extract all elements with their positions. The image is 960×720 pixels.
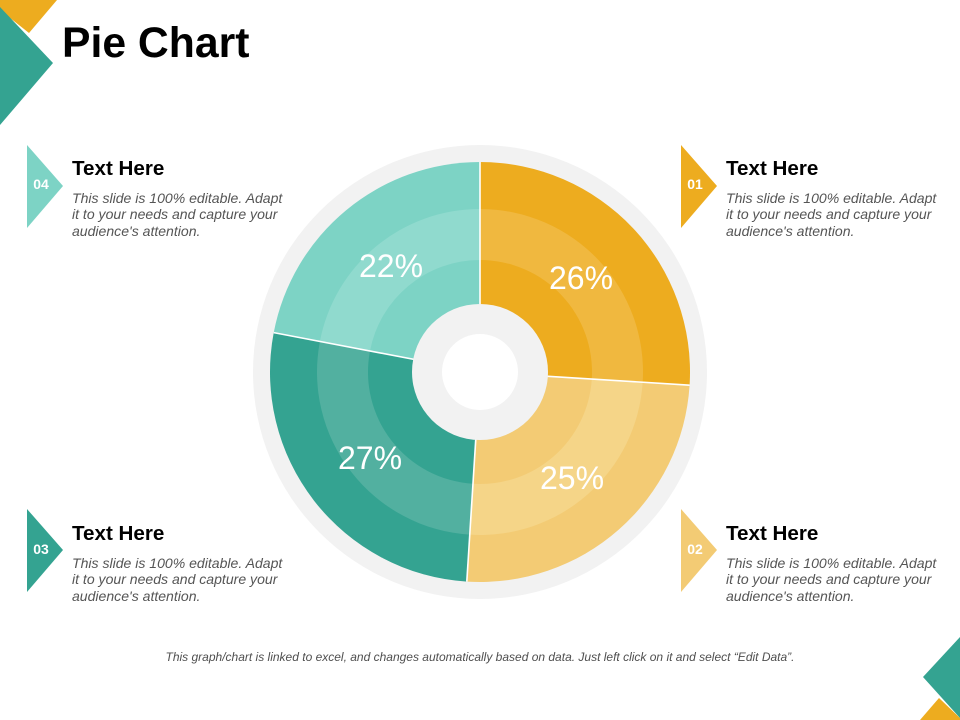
text block 01: Text Here [726, 156, 818, 180]
text block 01: audience's attention. [726, 222, 854, 238]
text block 04: This slide is 100% editable. Adapt [72, 190, 282, 206]
text block 03: Text Here [72, 522, 164, 544]
marker 01 [681, 145, 717, 228]
text block 04 [72, 156, 283, 238]
decorative corner: bottom right [920, 637, 960, 720]
marker 02: 02 [687, 541, 703, 557]
text block 04: audience's attention. [72, 222, 200, 238]
text block 02: This slide is 100% editable. Adapt [726, 554, 936, 570]
centre hole [412, 304, 548, 440]
slice 22%: 22% [359, 248, 423, 284]
title: Pie Chart [62, 19, 249, 67]
marker 01: 01 [687, 176, 703, 192]
slice 22% [274, 162, 480, 372]
text block 01: it to your needs and capture your [726, 206, 931, 222]
marker 03 [27, 509, 63, 592]
marker 04: 04 [33, 176, 49, 192]
text block 04: Text Here [72, 156, 164, 180]
text block 04: it to your needs and capture your [72, 206, 277, 222]
text block 03 [72, 522, 283, 604]
pie chart [253, 145, 707, 599]
decorative corner: top left [0, 0, 57, 125]
marker 02 [681, 509, 717, 592]
slice 26%: 26% [549, 260, 613, 296]
slice 25%: 25% [540, 460, 604, 496]
text block 02: it to your needs and capture your [726, 571, 931, 587]
marker 04 [27, 145, 63, 228]
text block 03: audience's attention. [72, 588, 200, 604]
slice 27%: 27% [338, 440, 402, 476]
text block 02: audience's attention. [726, 588, 854, 604]
slice 26% [480, 162, 690, 385]
text block 02 [726, 522, 937, 604]
text block 01 [726, 156, 937, 238]
text block 01: This slide is 100% editable. Adapt [726, 190, 936, 206]
text block 03: it to your needs and capture your [72, 571, 277, 587]
outer grey ring [253, 145, 707, 599]
text block 02: Text Here [726, 522, 818, 544]
footnote: This graph/chart is linked to excel, and changes automatically based on data. Just left click on it and select “Edit Data”. [166, 650, 794, 664]
marker 03: 03 [33, 541, 49, 557]
text block 03: This slide is 100% editable. Adapt [72, 554, 282, 570]
slice 25% [467, 372, 690, 582]
slice 27% [270, 333, 480, 582]
